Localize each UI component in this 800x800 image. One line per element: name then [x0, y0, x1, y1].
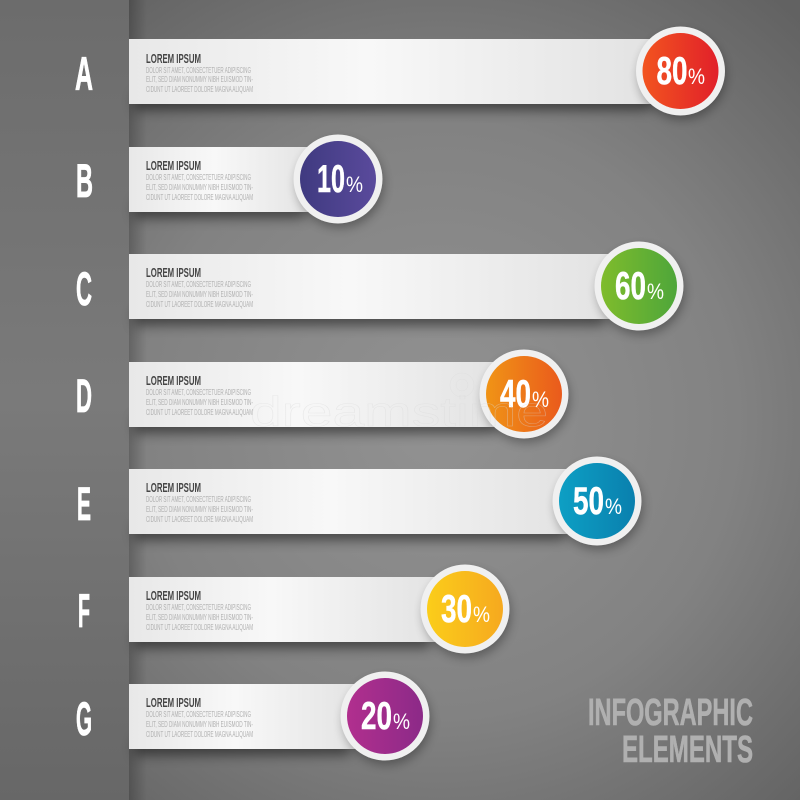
- text B: ELIT, SED DIAM NONUMMY NIBH EUISMOD TIN-: [146, 183, 253, 192]
- text E: DOLOR SIT AMET, CONSECTETUER ADIPISCING: [146, 495, 251, 504]
- bar F: [129, 577, 445, 648]
- row E: E: [77, 477, 91, 530]
- badge 40%: 40: [500, 373, 531, 416]
- text A: CIDUNT UT LAOREET DOLORE MAGNA ALIQUAM: [146, 85, 253, 94]
- text F: ELIT, SED DIAM NONUMMY NIBH EUISMOD TIN-: [146, 613, 253, 622]
- text D: CIDUNT UT LAOREET DOLORE MAGNA ALIQUAM: [146, 408, 253, 417]
- badge 10%: [294, 134, 384, 228]
- badge 40%: %: [532, 387, 549, 412]
- text D: ELIT, SED DIAM NONUMMY NIBH EUISMOD TIN-: [146, 398, 253, 407]
- text C: DOLOR SIT AMET, CONSECTETUER ADIPISCING: [146, 280, 251, 289]
- strip edge shadow: [129, 0, 147, 800]
- text G: [146, 695, 253, 739]
- badge 30%: %: [473, 602, 490, 627]
- title: infographic elements: [588, 692, 753, 771]
- badge 50%: [552, 456, 643, 550]
- badge 40%: [480, 350, 570, 443]
- text G: DOLOR SIT AMET, CONSECTETUER ADIPISCING: [146, 710, 251, 719]
- text C: ELIT, SED DIAM NONUMMY NIBH EUISMOD TIN-: [146, 290, 253, 299]
- badge 10%: 10: [317, 158, 345, 201]
- text B: LOREM IPSUM: [146, 158, 201, 173]
- row C: C: [76, 262, 92, 315]
- badge 80%: 80: [656, 50, 688, 93]
- badge 60%: [594, 242, 685, 335]
- text F: DOLOR SIT AMET, CONSECTETUER ADIPISCING: [146, 603, 251, 612]
- text A: DOLOR SIT AMET, CONSECTETUER ADIPISCING: [146, 66, 251, 75]
- badge 30%: [420, 564, 511, 658]
- badge 50%: 50: [573, 480, 604, 523]
- bar B: [129, 147, 319, 218]
- row A: [75, 26, 726, 120]
- badge 30%: 30: [441, 588, 472, 631]
- bar G: [129, 684, 365, 755]
- row F: F: [78, 584, 90, 637]
- text D: DOLOR SIT AMET, CONSECTETUER ADIPISCING: [146, 388, 251, 397]
- text D: [146, 373, 253, 417]
- text C: LOREM IPSUM: [146, 265, 201, 280]
- text D: LOREM IPSUM: [146, 373, 201, 388]
- text A: [146, 51, 253, 94]
- text F: [146, 588, 253, 632]
- text F: CIDUNT UT LAOREET DOLORE MAGNA ALIQUAM: [146, 623, 253, 632]
- row F: [78, 564, 511, 658]
- bar E: [129, 469, 577, 540]
- text E: CIDUNT UT LAOREET DOLORE MAGNA ALIQUAM: [146, 515, 253, 524]
- badge 20%: %: [393, 709, 410, 734]
- row G: [76, 672, 431, 765]
- text B: CIDUNT UT LAOREET DOLORE MAGNA ALIQUAM: [146, 193, 253, 202]
- row G: G: [76, 692, 92, 745]
- text E: LOREM IPSUM: [146, 480, 201, 495]
- badge 80%: %: [688, 64, 705, 89]
- text C: CIDUNT UT LAOREET DOLORE MAGNA ALIQUAM: [146, 300, 253, 309]
- bar C: [129, 254, 619, 325]
- row C: [76, 242, 685, 335]
- badge 60%: 60: [615, 265, 646, 308]
- badge 60%: %: [647, 279, 664, 304]
- text G: LOREM IPSUM: [146, 695, 201, 710]
- badge 20%: [340, 672, 431, 765]
- text G: CIDUNT UT LAOREET DOLORE MAGNA ALIQUAM: [146, 730, 253, 739]
- text A: ELIT, SED DIAM NONUMMY NIBH EUISMOD TIN-: [146, 75, 253, 84]
- text E: ELIT, SED DIAM NONUMMY NIBH EUISMOD TIN-: [146, 505, 253, 514]
- text B: [146, 158, 253, 202]
- watermark: dreamstime: [250, 388, 548, 435]
- text C: [146, 265, 253, 309]
- bar D: [129, 362, 504, 433]
- badge 50%: %: [605, 494, 622, 519]
- text F: LOREM IPSUM: [146, 588, 201, 603]
- badge 20%: 20: [361, 695, 392, 738]
- bar A: [129, 39, 659, 110]
- row D: [76, 350, 570, 443]
- text B: DOLOR SIT AMET, CONSECTETUER ADIPISCING: [146, 173, 251, 182]
- watermark: [250, 373, 548, 435]
- letter A: A: [75, 47, 93, 100]
- text A: LOREM IPSUM: [146, 51, 201, 66]
- badge 80%: [636, 26, 726, 120]
- row E: [77, 456, 643, 550]
- text G: ELIT, SED DIAM NONUMMY NIBH EUISMOD TIN-: [146, 720, 253, 729]
- row B: [76, 134, 384, 228]
- letter B: B: [76, 154, 93, 207]
- text E: [146, 480, 253, 524]
- badge 10%: %: [346, 172, 363, 197]
- left strip: [0, 0, 129, 800]
- row D: D: [76, 369, 92, 422]
